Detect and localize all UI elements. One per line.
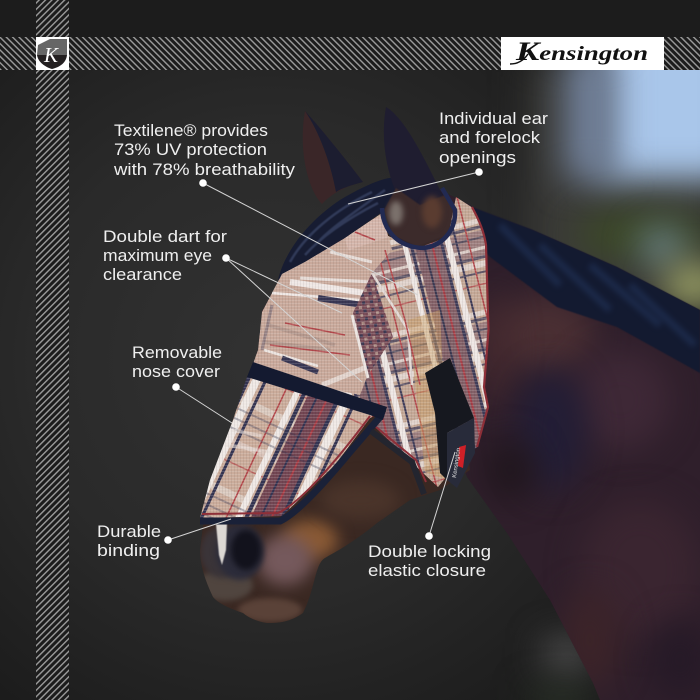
background photo: blurred sky and foliage	[530, 20, 700, 700]
callout: elastic closure: Double locking	[368, 543, 491, 561]
left ear	[303, 111, 363, 204]
callout: ear openings	[439, 110, 549, 167]
neck and body	[430, 180, 700, 700]
head	[200, 232, 470, 623]
callout lines	[168, 172, 479, 540]
ear opening binding	[382, 188, 455, 248]
stripe band: vertical	[36, 0, 69, 700]
stripe band: horizontal	[0, 37, 700, 70]
callout: binding: Durable	[97, 523, 161, 541]
callout: elastic closure	[368, 543, 491, 580]
fly mask	[190, 188, 500, 525]
logo: Kensington wordmark: K ensington	[515, 37, 648, 66]
callout dots	[164, 168, 483, 544]
nose binding	[200, 417, 380, 521]
horse	[190, 107, 700, 700]
callout: elastic closure: elastic closure	[368, 562, 486, 580]
jaw binding	[371, 431, 424, 494]
eye dart section	[250, 213, 392, 395]
elastic tag	[447, 418, 475, 488]
mask right border	[472, 207, 488, 447]
callout: double dart: clearance	[103, 266, 182, 284]
callout: Textilene	[113, 122, 296, 179]
callout: Textilene: Textilene® provides	[114, 122, 268, 140]
right ear	[384, 107, 456, 247]
callout: double dart: maximum eye	[103, 247, 212, 265]
logo: Kensington wordmark	[501, 37, 664, 70]
callout: binding	[97, 523, 161, 560]
callout: ear openings: and forelock	[439, 129, 541, 147]
logo: K shield	[36, 37, 69, 70]
blaze	[216, 524, 227, 565]
callout: Textilene: with 78% breathability	[113, 161, 296, 179]
callout: nose cover: Removable	[132, 344, 222, 362]
callout: Textilene: 73% UV protection	[114, 141, 267, 159]
upper mask plaid	[254, 197, 488, 487]
nose cover plaid	[200, 377, 387, 518]
callout: ear openings: openings	[439, 149, 516, 167]
callout: ear openings: Individual ear	[439, 110, 549, 128]
nose cover strap	[247, 362, 387, 420]
forelock	[278, 178, 395, 280]
callout: nose cover	[132, 344, 222, 381]
callout: double dart	[103, 228, 228, 284]
callout: double dart: Double dart for	[103, 228, 228, 246]
logo: K shield: K	[43, 43, 59, 67]
callout: binding: binding	[97, 542, 160, 560]
dart patch	[353, 273, 393, 377]
elastic tag: Kensington	[452, 448, 462, 478]
neck mane	[465, 205, 700, 373]
velcro closure	[425, 358, 474, 480]
callout: nose cover: nose cover	[132, 363, 221, 381]
